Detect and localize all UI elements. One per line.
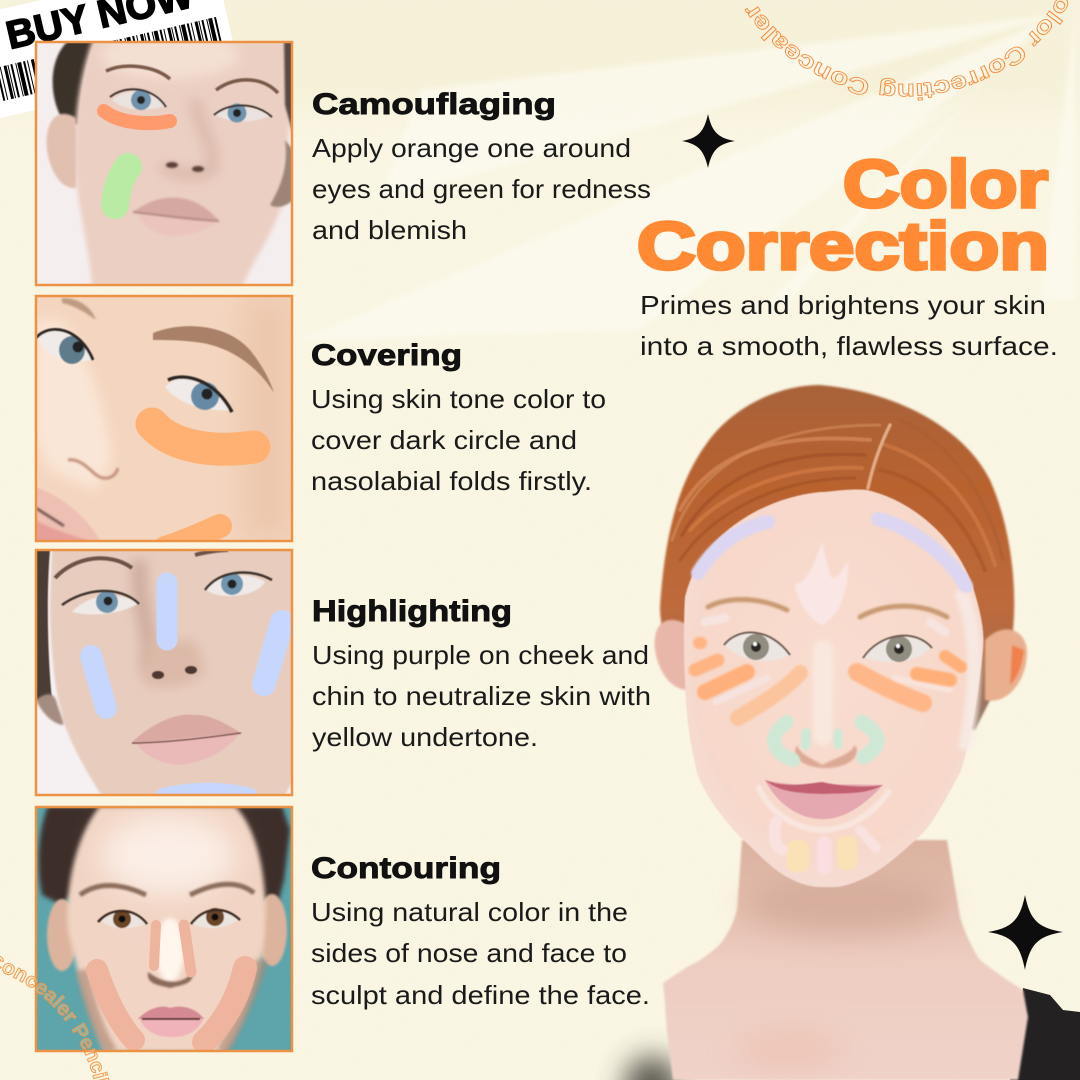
- nose base: [148, 972, 193, 988]
- step 3: highlighting text: chin to neutralize skin with: [312, 681, 651, 711]
- skin: [50, 549, 293, 796]
- green concealer strokes: [774, 722, 877, 760]
- under-eye orange strokes: [695, 643, 961, 718]
- chin concealer: [774, 822, 876, 874]
- panel frame 2: [36, 296, 292, 541]
- light nose side: [35, 320, 112, 490]
- panel frame 1: [36, 42, 292, 285]
- title: Correction: [637, 209, 1049, 284]
- step 4: contouring text: [311, 852, 650, 1010]
- title: [637, 147, 1049, 284]
- contour strokes: [97, 925, 245, 1042]
- step 3: highlighting text: Using purple on cheek and: [312, 640, 649, 670]
- hair right: [282, 43, 291, 132]
- left brow: [62, 298, 96, 320]
- subtitle: Primes and brightens your skin: [640, 290, 1046, 320]
- ears: [47, 894, 287, 971]
- brows: [55, 550, 228, 578]
- step 2: covering text: cover dark circle and: [311, 425, 577, 455]
- forehead highlight: [795, 543, 848, 625]
- face: [67, 806, 266, 1052]
- nose shape: [795, 745, 857, 768]
- step 2: covering text: Covering: [311, 339, 462, 372]
- step 1: camouflaging text: and blemish: [312, 215, 467, 245]
- step 4: contouring text: sculpt and define the face.: [311, 980, 650, 1010]
- hair: [660, 385, 1014, 730]
- forehead highlight: [100, 815, 236, 895]
- brows: [708, 600, 947, 617]
- dark shadow bottom left: [624, 1056, 680, 1080]
- halo around lips: [758, 786, 890, 830]
- step 1: camouflaging text: [312, 88, 651, 245]
- face: [684, 489, 983, 887]
- panel: camouflaging photo: [35, 31, 293, 286]
- hair: [37, 808, 291, 904]
- ears: [655, 620, 1027, 701]
- left ear: [47, 114, 76, 188]
- brows: [153, 326, 274, 393]
- hair strands: [672, 420, 1003, 570]
- hair: [53, 41, 95, 125]
- subtitle: into a smooth, flawless surface.: [640, 331, 1058, 361]
- step 3: highlighting text: Highlighting: [312, 595, 512, 628]
- model portrait: [624, 385, 1080, 1080]
- nose shadow: [162, 100, 212, 174]
- step 2: covering text: [311, 339, 606, 496]
- eyes: [724, 633, 932, 662]
- nostrils: [152, 666, 197, 679]
- brows: [106, 66, 278, 93]
- step 1: camouflaging text: Apply orange one around: [312, 133, 631, 163]
- black top: [1010, 988, 1080, 1080]
- blue concealer marks: [91, 583, 282, 795]
- subtitle: [640, 290, 1058, 361]
- buy now sticker: [0, 0, 238, 125]
- face skin: [75, 41, 290, 286]
- step 1: camouflaging text: eyes and green for redness: [312, 174, 651, 204]
- eyes: [62, 573, 272, 614]
- forehead purple strokes: [698, 519, 966, 586]
- step 3: highlighting text: yellow undertone.: [312, 722, 538, 752]
- nostrils: [166, 162, 204, 172]
- upper eyelid pink marks: [705, 618, 945, 632]
- ear lobe: [36, 694, 63, 725]
- step 2: covering text: nasolabial folds firstly.: [311, 466, 592, 496]
- under chin shadow: [745, 875, 945, 935]
- jaw shadow: [82, 960, 262, 1052]
- forehead light: [102, 44, 238, 79]
- icon: large sparkle: [988, 895, 1063, 970]
- step 3: highlighting text: [312, 595, 651, 752]
- right face white edge: [960, 590, 974, 750]
- nose: [141, 640, 205, 687]
- green concealer stroke: [115, 167, 128, 205]
- icon: small sparkle: [682, 114, 735, 168]
- brows: [80, 884, 254, 895]
- step 2: covering text: Using skin tone color to: [311, 384, 606, 414]
- eyes: [110, 89, 272, 122]
- panel frame 4: [36, 807, 292, 1051]
- step 4: contouring text: sides of nose and face to: [311, 938, 627, 968]
- right shade: [240, 295, 295, 542]
- neck and shoulders: [663, 840, 1028, 1080]
- nose highlight: [813, 650, 833, 735]
- lips: [765, 780, 883, 819]
- orange concealer stroke: [104, 111, 170, 123]
- eyes: [36, 329, 232, 412]
- lips: [138, 1007, 204, 1037]
- socket shadow near nose: [139, 560, 150, 670]
- chin concealer: [165, 526, 220, 548]
- hair strip: [35, 549, 52, 700]
- step 4: contouring text: Using natural color in the: [311, 897, 628, 927]
- panel: highlighting photo: [35, 549, 293, 796]
- lips: [133, 198, 219, 236]
- lips: [35, 487, 100, 542]
- panel frame 3: [36, 550, 292, 795]
- panel: contouring photo: [35, 806, 293, 1052]
- step 4: contouring text: Contouring: [311, 852, 501, 885]
- nose highlight: [156, 918, 184, 982]
- lips: [132, 715, 241, 765]
- hair lobe right: [270, 140, 293, 207]
- panel: covering photo: [35, 295, 295, 548]
- nose base shadow: [68, 460, 118, 478]
- eyes: [98, 908, 240, 928]
- orange concealer: [152, 424, 254, 449]
- step 1: camouflaging text: Camouflaging: [312, 88, 556, 121]
- title: Color: [843, 147, 1048, 222]
- collar blush: [735, 1028, 845, 1072]
